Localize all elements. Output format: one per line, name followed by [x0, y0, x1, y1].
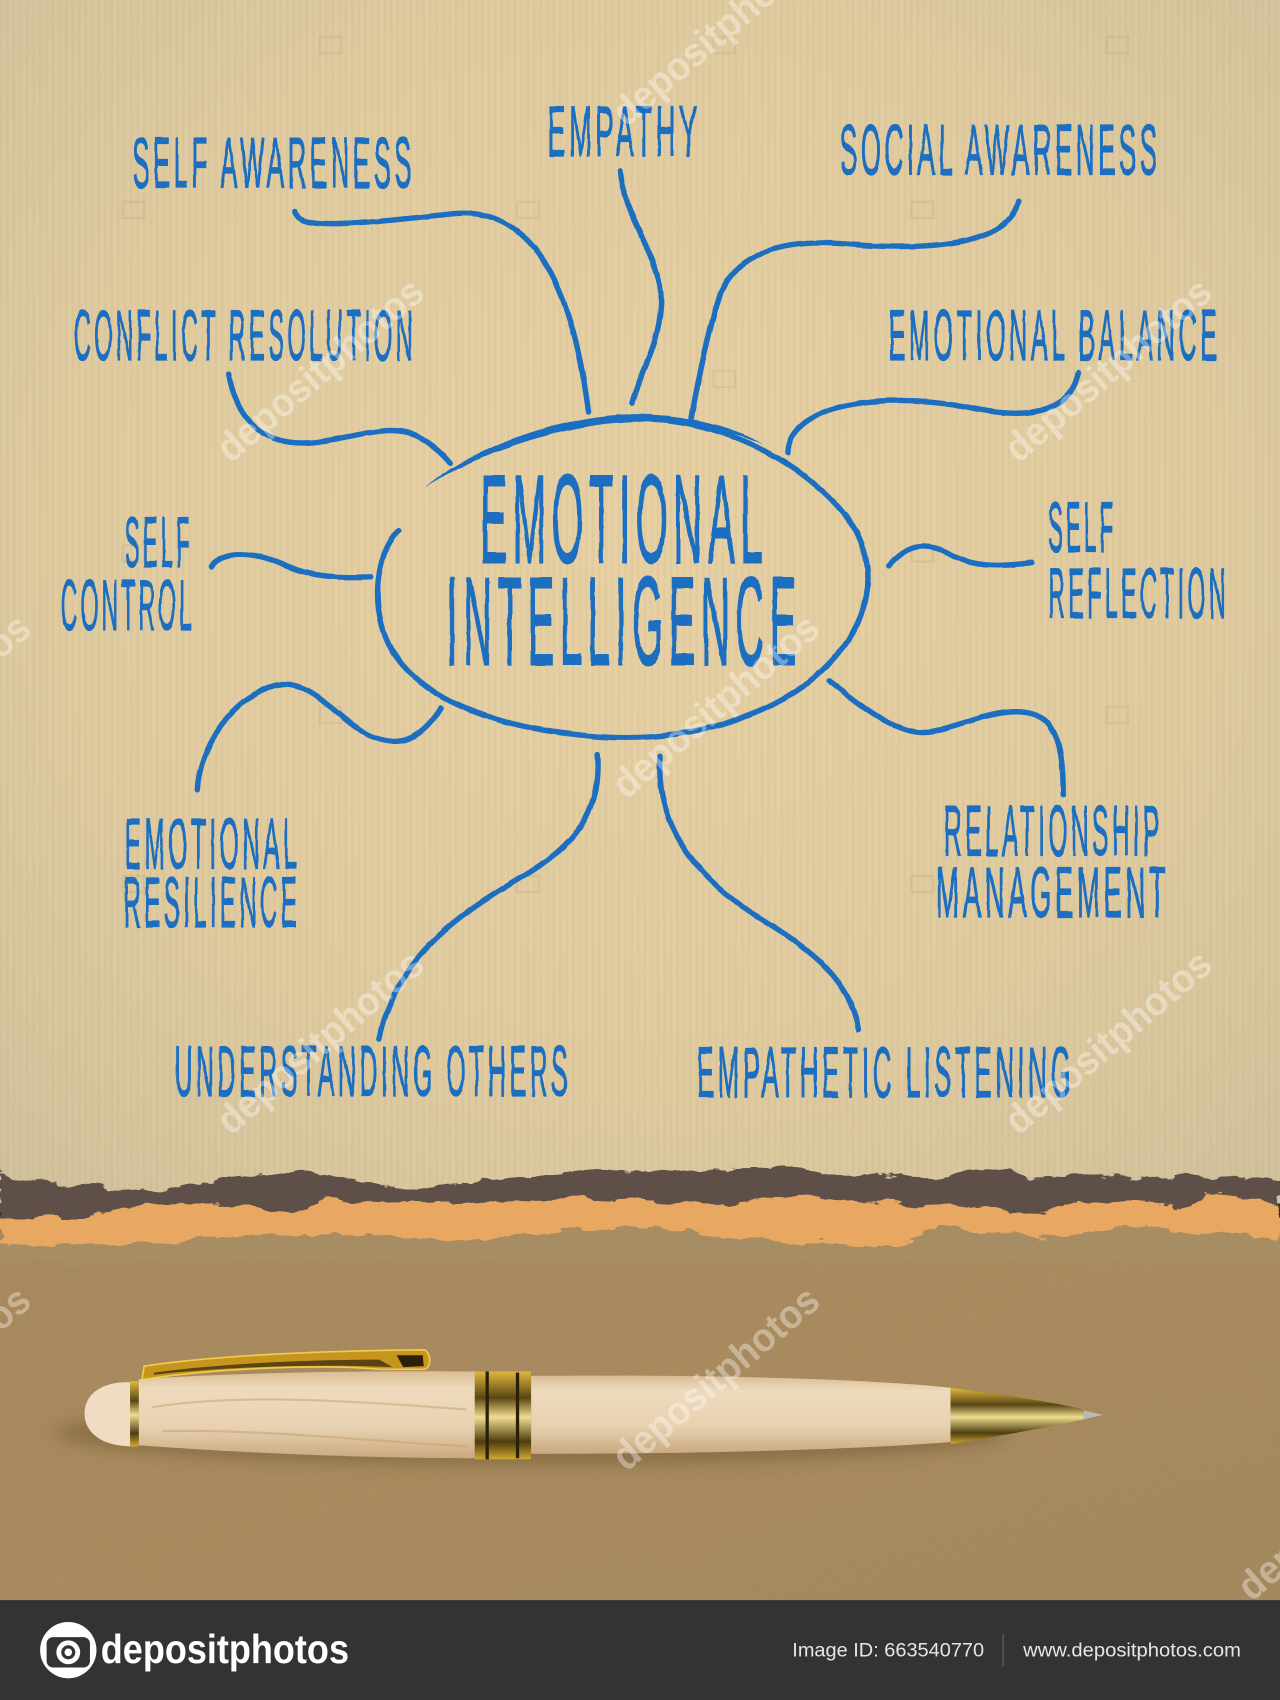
- branch: self reflection: SELF: [1048, 488, 1116, 568]
- mind map: EMPATHY: [547, 92, 701, 172]
- branch: empathetic listening: [660, 757, 1074, 1113]
- watermarks: depositphotos: [208, 942, 433, 1143]
- pen upper barrel: [139, 1371, 477, 1458]
- logo icon: camera: [40, 1622, 96, 1678]
- panel: top paper sheet: [0, 0, 1280, 1203]
- branch: emotional resilience: [124, 684, 441, 943]
- mind map: CONFLICT RESOLUTION: [74, 296, 416, 376]
- branch: emotional resilience: EMOTIONAL: [125, 804, 300, 884]
- pen metal end ring: [130, 1381, 139, 1446]
- torn orange paper layer: [0, 1193, 1280, 1247]
- branch: emotional balance: [788, 296, 1220, 453]
- website: www.depositphotos.com: [1022, 1640, 1241, 1662]
- watermarks: depositphotos: [996, 270, 1221, 471]
- branch: relationship management: [829, 681, 1169, 933]
- torn dark paper layer: [0, 1167, 1280, 1225]
- watermarks: depositphotos: [996, 942, 1221, 1143]
- branch: self control: CONTROL: [61, 566, 195, 646]
- branch: self awareness: SELF AWARENESS: [132, 124, 415, 204]
- pen shadow: [54, 1401, 1008, 1466]
- pen centre band: [475, 1371, 531, 1459]
- branch: social awareness: [691, 111, 1161, 417]
- central title: [447, 449, 802, 692]
- branch: conflict resolution: [74, 296, 450, 463]
- mind map: UNDERSTANDING OTHERS: [174, 1032, 571, 1112]
- pen tip: [1084, 1411, 1103, 1419]
- footer bar: [0, 1600, 1280, 1700]
- logo wordmark: depositphotos: [101, 1626, 349, 1672]
- image id: Image ID: 663540770: [792, 1640, 984, 1662]
- watermarks: depositphotos: [604, 606, 828, 807]
- branch: self reflection: [889, 488, 1229, 634]
- branch: self control: [61, 503, 371, 646]
- branch: understanding others: [174, 755, 598, 1112]
- pen: [54, 1350, 1103, 1466]
- pen end cap: [85, 1382, 135, 1446]
- faint camera marks: [122, 37, 1128, 892]
- watermarks: depositphotos: [604, 1278, 828, 1479]
- torn kraft fringe: [0, 1225, 1280, 1263]
- branch: self control: SELF: [125, 503, 193, 583]
- pen clip: [142, 1350, 430, 1379]
- watermarks: depositphotos: [208, 270, 433, 471]
- pen wood grain: [152, 1398, 943, 1446]
- panel: bottom kraft paper: [0, 1225, 1280, 1600]
- pen lower barrel: [531, 1376, 951, 1454]
- branch: self awareness: [132, 124, 589, 412]
- branch: emotional resilience: RESILIENCE: [124, 863, 300, 943]
- pen nib: [951, 1388, 1084, 1444]
- branch: empathy: [547, 92, 701, 403]
- mind map: [61, 92, 1229, 1113]
- central oval: [378, 414, 868, 738]
